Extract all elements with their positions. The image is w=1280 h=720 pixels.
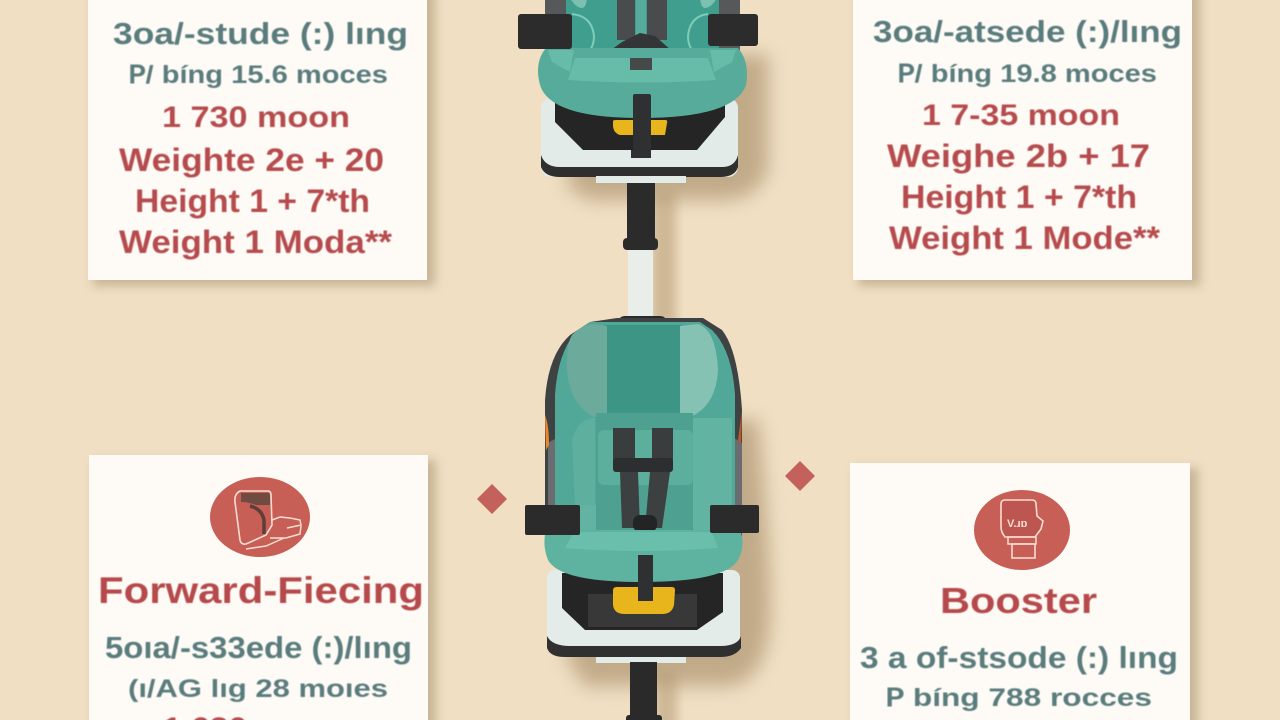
icon: right diamond (785, 461, 815, 491)
icon: booster seat: V.ɹɒ (1007, 518, 1028, 530)
connector pole: lower (596, 656, 686, 720)
panel: top-left stage card: 1 730 moon (162, 101, 350, 134)
panel: booster card: ꓑ bíng 788 rocces (885, 684, 1152, 712)
panel: forward-facing card: 5oıa/-s33ede (:)/lıng (105, 630, 412, 665)
icon: forward-facing seat (210, 477, 310, 557)
illustration: upper car seat (518, 0, 758, 183)
panel: top-left stage card: 3oa/-stude (:) lıng (113, 16, 408, 51)
panel: top-left stage card: ꓑ/ bíng 15.6 moces (128, 61, 388, 89)
panel: top-right stage card: 1 7-35 moon (922, 99, 1120, 132)
panel: top-right stage card (853, 0, 1200, 286)
panel: top-right stage card: ꓑ/ bíng 19.8 moces (897, 60, 1157, 88)
panel: top-right stage card: Weighe 2b + 17 (887, 138, 1150, 174)
panel: forward-facing card: Forward-Fiecing (98, 570, 424, 611)
connector pole: upper (623, 183, 658, 320)
shadows behind seats and poles (565, 55, 770, 720)
panel: booster card (850, 463, 1198, 720)
panel: booster card: Booster (940, 580, 1097, 621)
panel: forward-facing card (89, 455, 436, 720)
panel: top-right stage card: 3oa/-atsede (:)/lıng (873, 14, 1182, 49)
panel: top-left stage card: Height 1 + 7*th (135, 183, 370, 219)
panel: top-right stage card: Weight 1 Mode** (889, 220, 1161, 256)
panel: booster card: 3 a of-stsode (:) lıng (860, 640, 1178, 675)
panel: top-left stage card (88, 0, 435, 286)
panel: top-left stage card: Weighte 2e + 20 (119, 142, 384, 178)
icon: booster seat (974, 490, 1070, 570)
icon: left diamond (477, 484, 507, 514)
panel: top-right stage card: Height 1 + 7*th (901, 179, 1137, 215)
panel: top-left stage card: Weight 1 Moda** (119, 224, 393, 260)
illustration: lower car seat (525, 316, 759, 657)
panel: forward-facing card: (ı/AG lıg 28 moıes (128, 675, 388, 703)
